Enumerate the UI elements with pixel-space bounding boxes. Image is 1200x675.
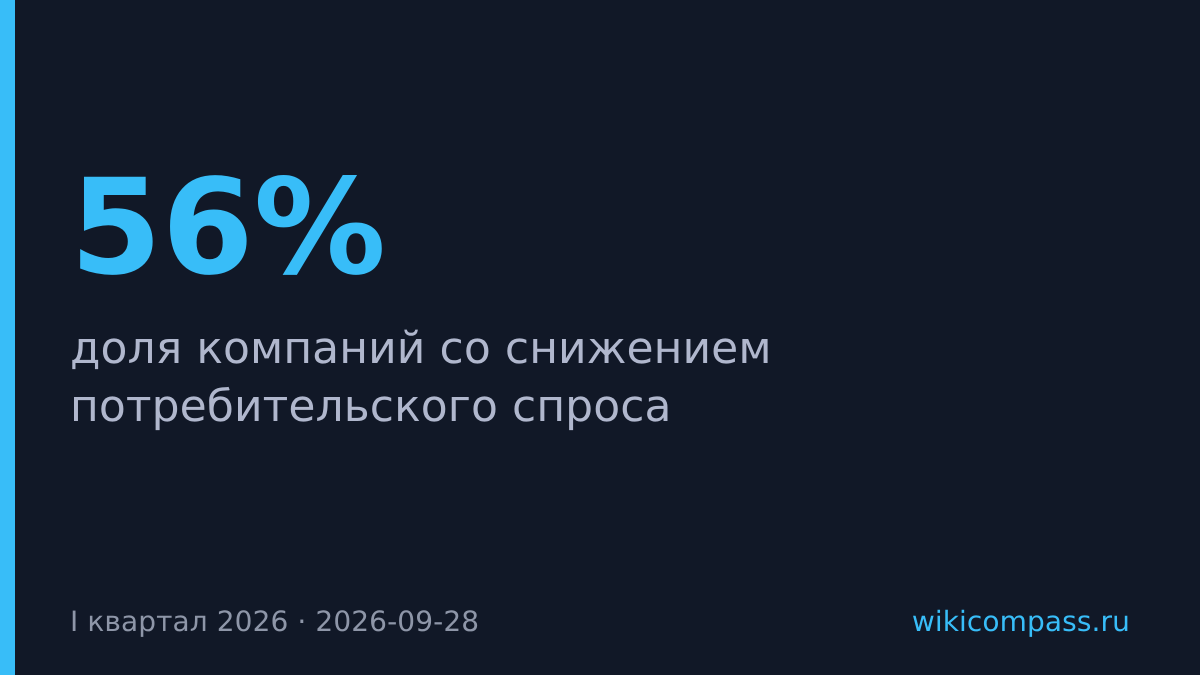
description text: потребительского спроса [70,381,672,432]
description text: доля компаний со снижением [70,323,772,374]
footer: period and date: I квартал 2026 · 2026-09-28 [70,605,479,638]
accent bar [0,0,15,675]
footer: site name: wikicompass.ru [912,605,1130,638]
description text [70,323,772,432]
big number: 56%: 56% [70,151,386,305]
